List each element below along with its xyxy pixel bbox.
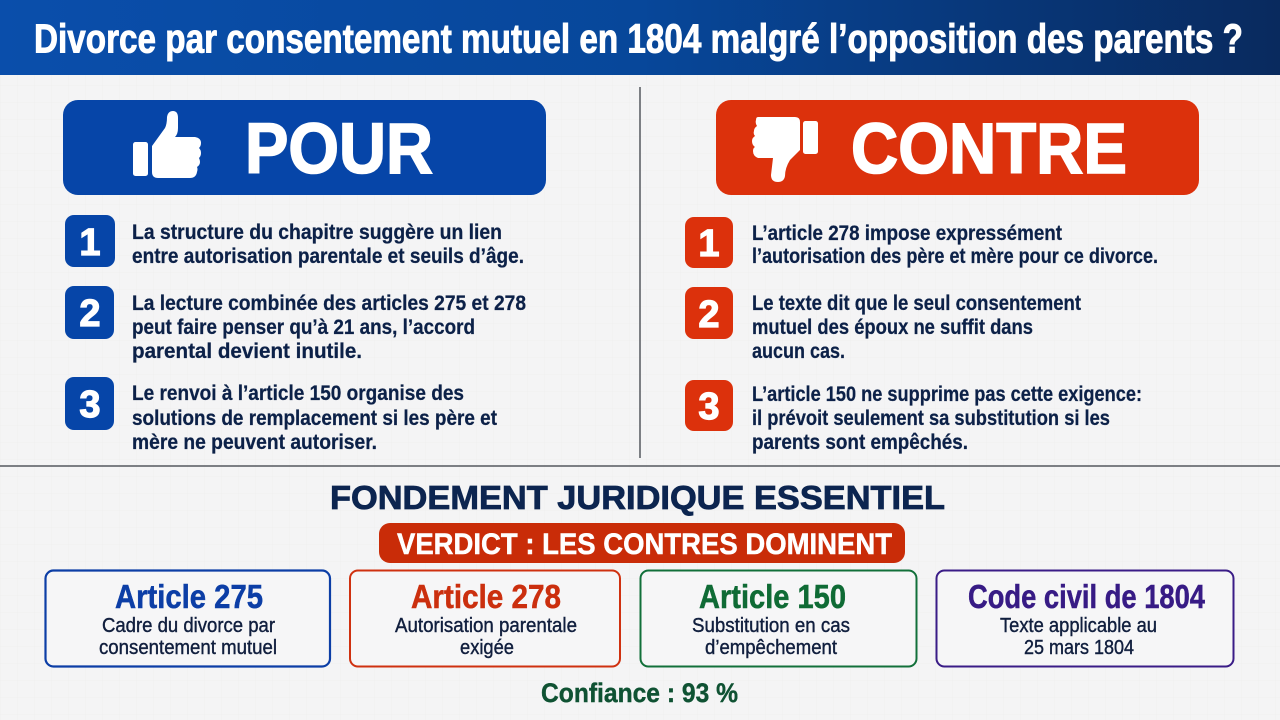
- pour argument 2: 2: [79, 293, 101, 335]
- card: code civil de 1804: Code civil de 1804: [968, 578, 1206, 615]
- pour argument 3: [65, 377, 497, 454]
- pour argument 1: 1: [79, 222, 101, 264]
- contre argument 3: [685, 380, 1142, 454]
- card: code civil de 1804: Texte applicable au: [1000, 615, 1157, 637]
- pour argument 1: entre autorisation parentale et seuils d’âge.: [132, 244, 524, 268]
- card: article 278: exigée: [460, 637, 514, 659]
- pour argument 2: [65, 286, 526, 363]
- card: article 150: d’empêchement: [705, 637, 837, 659]
- contre argument 3: parents sont empêchés.: [752, 430, 968, 454]
- verdict badge: VERDICT : LES CONTRES DOMINENT: [397, 528, 892, 561]
- pour argument 3: mère ne peuvent autoriser.: [132, 430, 377, 454]
- card: article 150: Article 150: [699, 578, 846, 615]
- contre argument 3: 3: [698, 386, 720, 428]
- card: article 275: Article 275: [115, 578, 263, 615]
- card: article 278: Article 278: [411, 578, 561, 615]
- card: article 275: Cadre du divorce par: [102, 615, 275, 637]
- card: code civil de 1804: [936, 570, 1234, 666]
- contre argument 1: L’article 278 impose expressément: [752, 221, 1062, 245]
- pour header: [63, 100, 546, 195]
- pour argument 1: [65, 215, 524, 268]
- panel: contre: [685, 100, 1199, 454]
- confidence score: Confiance : 93 %: [541, 678, 738, 708]
- card: article 278: Autorisation parentale: [395, 615, 577, 637]
- card: article 278: [350, 570, 620, 666]
- contre argument 1: l’autorisation des père et mère pour ce divorce.: [752, 244, 1158, 268]
- contre argument 2: Le texte dit que le seul consentement: [752, 291, 1081, 315]
- contre argument 2: mutuel des époux ne suffit dans: [752, 315, 1033, 339]
- pour argument 3: Le renvoi à l’article 150 organise des: [132, 381, 464, 405]
- icon: thumbs down: [752, 117, 818, 182]
- icon: thumbs up: [133, 111, 201, 178]
- panel: pour: [63, 100, 546, 454]
- contre header: CONTRE: [851, 110, 1127, 189]
- pour argument 2: La lecture combinée des articles 275 et 278: [132, 291, 526, 315]
- card: code civil de 1804: 25 mars 1804: [1024, 637, 1134, 659]
- pour argument 1: La structure du chapitre suggère un lien: [132, 220, 502, 244]
- pour argument 3: solutions de remplacement si les père et: [132, 406, 497, 430]
- pour argument 3: 3: [79, 384, 101, 426]
- contre argument 2: aucun cas.: [752, 339, 845, 363]
- title banner: [0, 0, 1280, 75]
- card: article 275: consentement mutuel: [99, 637, 277, 659]
- contre header: [716, 100, 1199, 195]
- pour argument 2: peut faire penser qu’à 21 ans, l’accord: [132, 315, 475, 339]
- contre argument 2: 2: [698, 294, 720, 336]
- contre argument 1: [685, 217, 1158, 268]
- contre argument 3: il prévoit seulement sa substitution si les: [752, 406, 1110, 430]
- card: article 150: Substitution en cas: [692, 615, 850, 637]
- contre argument 1: 1: [698, 223, 720, 265]
- card: article 275: [46, 570, 330, 666]
- card: article 150: [640, 570, 916, 666]
- pour header: POUR: [245, 110, 433, 189]
- contre argument 3: L’article 150 ne supprime pas cette exigence:: [752, 382, 1142, 406]
- contre argument 2: [685, 287, 1081, 363]
- heading: fondement juridique: FONDEMENT JURIDIQUE ESSENTIEL: [330, 479, 945, 516]
- pour argument 2: parental devient inutile.: [132, 339, 362, 363]
